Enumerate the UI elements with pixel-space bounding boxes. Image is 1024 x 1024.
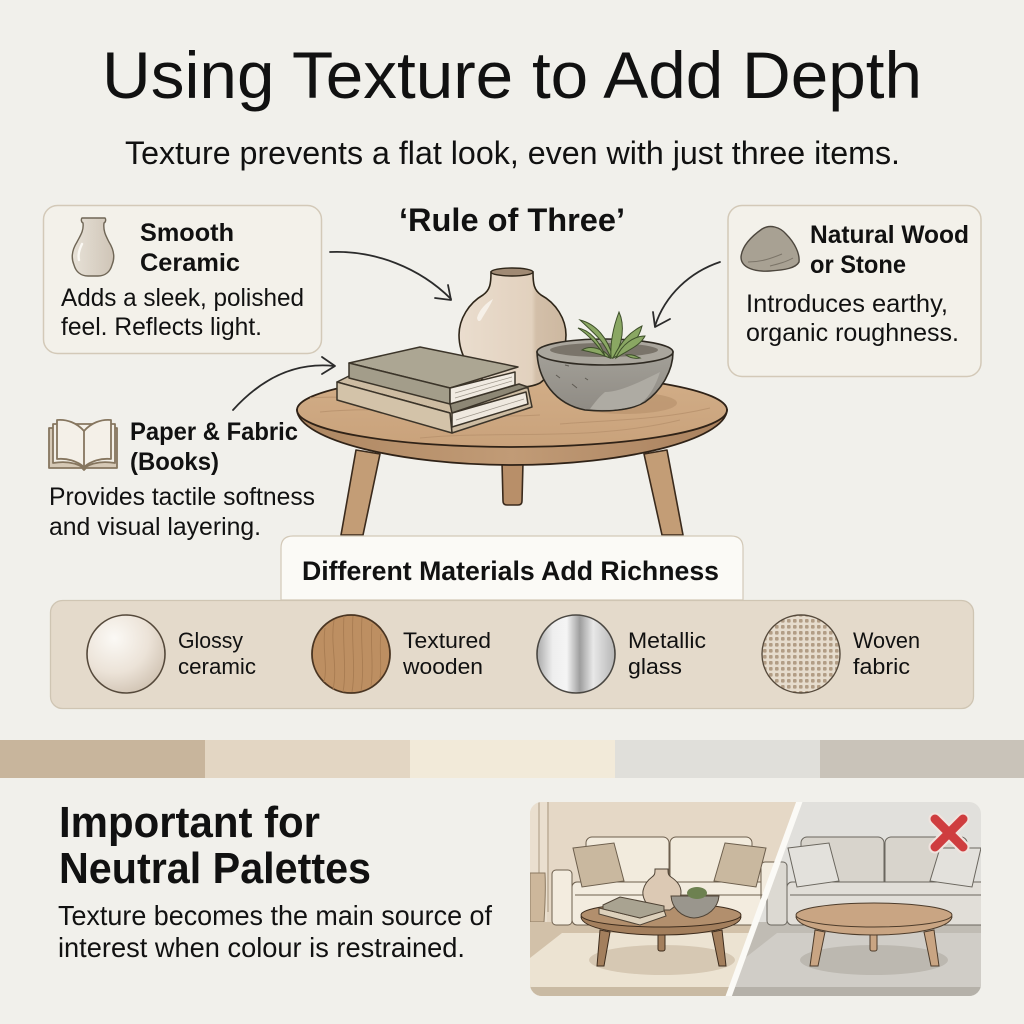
card heading: or Stone	[810, 251, 906, 279]
diagonal divider	[728, 800, 800, 998]
swatch: textured wooden	[312, 615, 491, 693]
heading tab: different materials: Different Materials Add Richness	[302, 556, 719, 586]
heading tab: different materials	[281, 536, 743, 600]
swatch: woven fabric: Woven	[853, 628, 920, 653]
plant	[578, 312, 645, 358]
block heading: Paper & Fabric	[130, 418, 298, 446]
title: Using Texture to Add Depth	[102, 38, 922, 112]
arrow: books label to books	[233, 357, 335, 410]
heading: important for neutral palettes: Neutral Palettes	[59, 844, 371, 893]
subtitle: Texture prevents a flat look, even with just three items.	[125, 135, 900, 171]
arrow: stone to bowl	[653, 262, 720, 327]
table top	[297, 373, 727, 465]
heading: important for neutral palettes: Important for	[59, 798, 320, 847]
body text: neutral palettes: interest when colour is restrained.	[58, 932, 465, 963]
swatch: woven fabric: fabric	[853, 654, 910, 679]
comparison illustration: textured vs flat room	[530, 800, 987, 998]
swatch: glossy ceramic	[87, 615, 256, 693]
stone bowl	[537, 339, 673, 411]
swatch: glossy ceramic: ceramic	[178, 654, 256, 679]
card heading: Ceramic	[140, 249, 240, 277]
swatch: woven fabric	[762, 615, 920, 693]
vase	[459, 268, 566, 388]
swatch: glossy ceramic: Glossy	[178, 628, 244, 653]
arrow: ceramic to vase	[330, 252, 451, 300]
heading: rule of three: ‘Rule of Three’	[399, 202, 625, 238]
icon: open book	[49, 420, 117, 470]
card heading: Natural Wood	[810, 221, 969, 249]
card heading: Smooth	[140, 219, 234, 247]
swatch: metallic glass: Metallic	[628, 628, 706, 653]
block body: Provides tactile softness	[49, 483, 315, 511]
neutral palette strip	[0, 740, 1024, 778]
illustration: table with vase, books and stone bowl	[297, 268, 727, 535]
card body: feel. Reflects light.	[61, 313, 262, 341]
panel: material swatches	[50, 600, 974, 708]
card body: Adds a sleek, polished	[61, 284, 304, 312]
block body: and visual layering.	[49, 513, 261, 541]
card body: organic roughness.	[746, 319, 959, 347]
icon: small vase	[72, 218, 114, 276]
panel: natural wood or stone	[728, 206, 981, 376]
icon: stone	[741, 227, 799, 271]
card body: Introduces earthy,	[746, 290, 948, 318]
left room: with texture	[530, 802, 810, 996]
swatch: textured wooden: wooden	[402, 654, 483, 679]
table legs	[341, 450, 683, 535]
swatch: metallic glass: glass	[628, 654, 682, 679]
block heading: (Books)	[130, 448, 219, 476]
body text: neutral palettes: Texture becomes the main source of	[58, 900, 492, 931]
icon: red cross	[935, 819, 963, 847]
panel: smooth ceramic	[44, 206, 322, 354]
books	[337, 347, 532, 433]
swatch: textured wooden: Textured	[403, 628, 491, 653]
right room: flat	[725, 802, 987, 996]
swatch: metallic glass	[537, 615, 706, 693]
panel: paper and fabric	[49, 418, 315, 541]
